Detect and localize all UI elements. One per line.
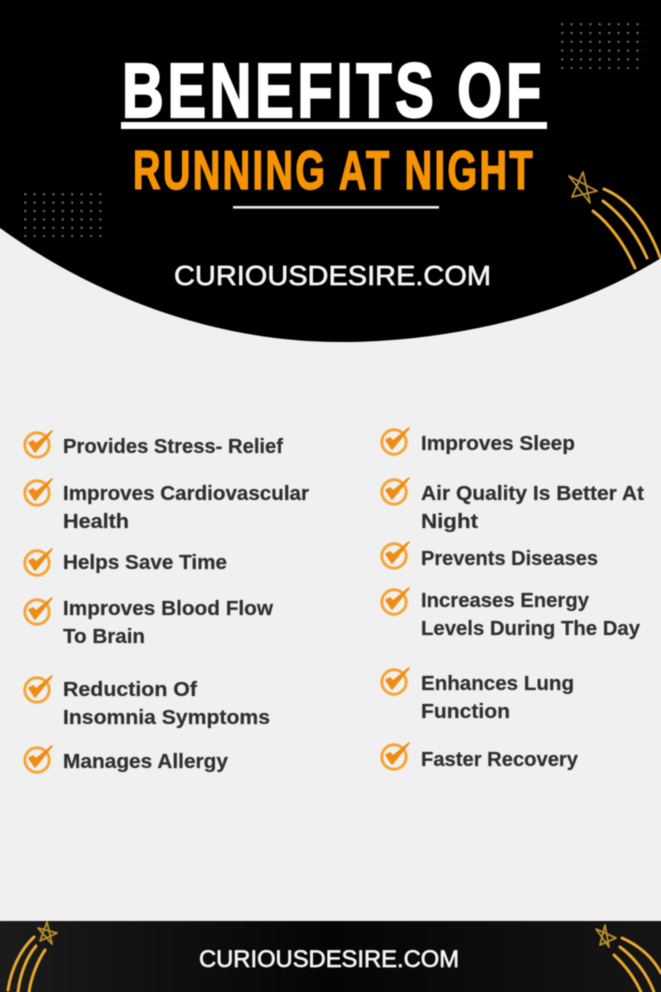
item: energy [382, 588, 641, 640]
item: save time [25, 549, 227, 575]
item: insomnia [25, 676, 270, 729]
item: air quality: Air Quality Is Better At [421, 483, 644, 505]
item: sleep: Improves Sleep [421, 433, 575, 455]
item: allergy [25, 746, 229, 773]
item: blood flow: To Brain [63, 626, 145, 648]
header panel: black curved banner [0, 0, 661, 342]
item: lung: Function [421, 701, 510, 723]
item: lung: Enhances Lung [421, 673, 574, 695]
item: insomnia: Reduction Of [63, 679, 197, 701]
item: diseases [382, 542, 598, 570]
item: stress relief: Provides Stress- Relief [63, 436, 283, 458]
item: save time: Helps Save Time [63, 552, 227, 574]
item: lung [382, 668, 574, 723]
item: cardiovascular: Health [63, 511, 129, 533]
item: cardiovascular [25, 479, 309, 533]
item: air quality [382, 478, 644, 533]
icon: left shooting star [8, 922, 57, 992]
icon: right shooting star [596, 925, 661, 992]
dot grid left [24, 193, 104, 237]
left column benefits [25, 431, 309, 773]
right column benefits [382, 428, 644, 771]
item: air quality: Night [421, 511, 478, 533]
footer site name: CURIOUSDESIRE.COM [199, 946, 459, 973]
item: diseases: Prevents Diseases [421, 548, 598, 570]
item: allergy: Manages Allergy [63, 751, 229, 773]
item: energy: Increases Energy [421, 590, 590, 612]
icon: shooting star [569, 172, 660, 268]
item: blood flow: Improves Blood Flow [63, 598, 273, 620]
short divider [233, 206, 439, 209]
item: recovery: Faster Recovery [421, 749, 579, 771]
item: blood flow [25, 598, 273, 648]
title underline [121, 122, 547, 129]
item: energy: Levels During The Day [421, 618, 641, 640]
dot grid top right [561, 23, 646, 69]
item: insomnia: Insomnia Symptoms [63, 707, 270, 729]
site name: CURIOUSDESIRE.COM [174, 260, 491, 291]
item: recovery [382, 743, 579, 771]
item: sleep [382, 428, 575, 455]
item: cardiovascular: Improves Cardiovascular [63, 483, 309, 505]
footer panel [0, 921, 661, 992]
item: stress relief [25, 431, 283, 458]
